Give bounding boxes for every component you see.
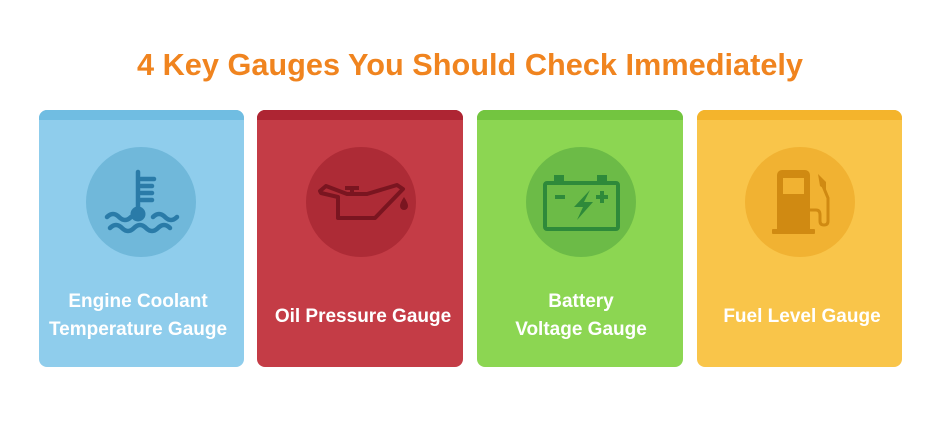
icon: thermometer in water xyxy=(86,147,196,257)
panel: battery xyxy=(477,110,683,367)
panel: engine coolant xyxy=(39,110,244,367)
label: engine coolant: Temperature Gauge xyxy=(49,319,227,340)
icon: fuel pump xyxy=(745,147,855,257)
panel: fuel level xyxy=(697,110,902,367)
label: battery: Battery xyxy=(548,291,614,312)
icon: oil can xyxy=(306,147,416,257)
icon: battery xyxy=(526,147,636,257)
panel: oil pressure xyxy=(257,110,463,367)
label: engine coolant: Engine Coolant xyxy=(68,291,208,312)
title: 4 Key Gauges You Should Check Immediately xyxy=(137,47,804,82)
label: battery: Voltage Gauge xyxy=(515,319,647,340)
label: fuel level: Fuel Level Gauge xyxy=(723,306,881,327)
label: oil pressure: Oil Pressure Gauge xyxy=(275,306,451,327)
